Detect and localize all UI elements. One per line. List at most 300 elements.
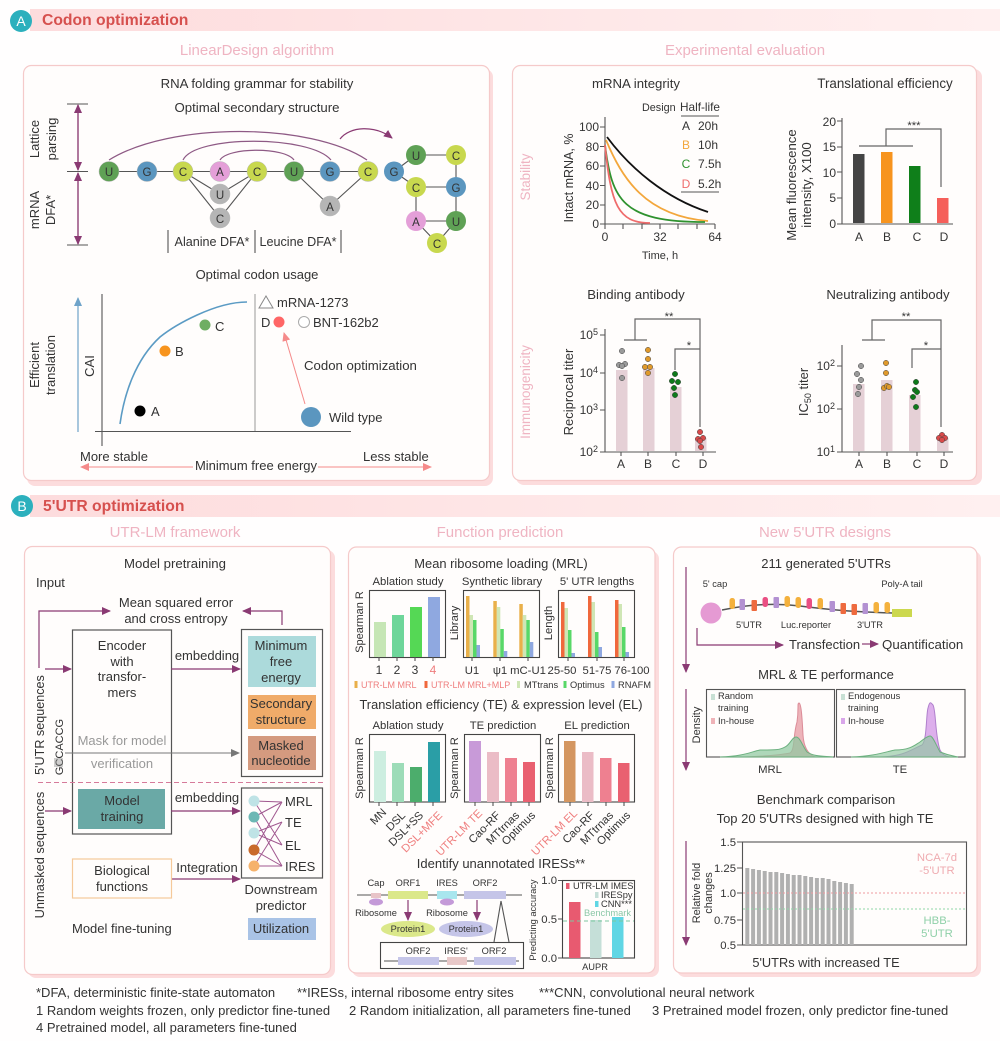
RNA hairpin structure: C: [412, 183, 420, 195]
arrows: data flow: Integration: [176, 860, 238, 875]
header: A Codon optimization: Codon optimization: [42, 12, 188, 29]
pretraining outputs box: Minimum: [255, 638, 307, 653]
footnotes: [36, 985, 948, 1035]
chart: TE prediction: MTtrnas: [484, 809, 522, 847]
RNA hairpin structure: [384, 145, 466, 253]
chart: Translational efficiency: 5: [829, 191, 836, 205]
RNA lattice nodes: C: [216, 214, 224, 226]
chart: MRL 5' UTR lengths: 25-50: [548, 665, 576, 677]
label: Efficient translation: translation: [43, 335, 58, 395]
arrows: data flow: embedding: [175, 648, 239, 663]
diagram: IRES translation: ORF2: [482, 946, 506, 956]
codon usage scatter: mRNA-1273: [277, 295, 349, 310]
chart: IRES predicting accuracy: CNN***: [601, 899, 632, 909]
diagram: IRES translation: Protein1: [391, 924, 425, 934]
chart: IRES predicting accuracy: Benchmark: [584, 908, 631, 918]
chart: EL prediction: EL prediction: [564, 720, 630, 732]
chart: EL prediction: Spearman R: [544, 737, 556, 799]
chart: IRES predicting accuracy: 0.5: [541, 914, 557, 926]
chart: Binding antibody: 3: [593, 402, 598, 412]
label: Efficient translation: [27, 335, 58, 395]
chart: TE prediction: Cao-RF: [467, 810, 503, 846]
footnotes: 2 Random initialization, all parameters fine-tuned: [349, 1003, 631, 1018]
chart: Binding antibody: C: [672, 457, 681, 471]
chart: Neutralizing antibody: D: [940, 457, 949, 471]
chart: TE prediction: Spearman R: [449, 737, 461, 799]
chart: TE ablation study: Spearman R: [354, 737, 366, 799]
sequence labels: [32, 675, 66, 918]
heading: New 5'UTR designs: New 5'UTR designs: [759, 524, 891, 541]
header: B 5'UTR optimization: B: [17, 498, 27, 514]
axis label: TE: TE: [893, 764, 908, 776]
text: Benchmark comparison: Benchmark comparison: [757, 792, 895, 807]
model training block: [78, 789, 165, 829]
text: Optimal secondary structure: Optimal secondary structure: [175, 100, 339, 115]
chart: Binding antibody: 5: [593, 327, 598, 337]
chart: fold changes: 1.0: [720, 888, 736, 900]
codon usage scatter: A: [151, 404, 160, 419]
chart: fold changes: [691, 837, 966, 952]
chart: Translational efficiency: intensity, X100: [799, 142, 814, 228]
label: Stability: Stability: [518, 153, 533, 200]
chart: fold changes: 0.75: [714, 915, 736, 927]
diagram: IRES translation: Ribosome: [426, 908, 468, 918]
chart: IRES predicting accuracy: Predicting accuracy: [528, 879, 538, 961]
chart: IRES predicting accuracy: 0.0: [541, 953, 557, 965]
legend: half-life: 7.5h: [698, 157, 721, 171]
label: Immunogenicity: Immunogenicity: [518, 345, 533, 439]
panel: LinearDesign algorithm: [24, 66, 493, 486]
chart: mRNA integrity: 80: [586, 140, 599, 154]
divider: pretraining and fine-tuning: [38, 782, 323, 784]
arrow: translation: [77, 298, 79, 432]
heading: Experimental evaluation: Experimental evaluation: [665, 42, 825, 59]
model training block: training: [101, 809, 143, 824]
diagram: mRNA construct: 5' cap: [703, 579, 727, 589]
chart: MRL synthetic library: Library: [449, 605, 461, 640]
chart: Binding antibody: B: [644, 457, 652, 471]
chart: mRNA integrity: 32: [653, 230, 667, 244]
chart: EL prediction: UTR-LM EL: [529, 808, 580, 858]
chart: MRL synthetic library: ψ1: [493, 665, 507, 677]
heading: 211 generated 5'UTRs: 211 generated 5'UTRs: [761, 556, 891, 571]
codon usage scatter: BNT-162b2: [313, 315, 379, 330]
chart: MRL 5' UTR lengths: [543, 576, 650, 677]
chart: EL prediction: Cao-RF: [561, 810, 597, 846]
RNA lattice nodes: A: [216, 167, 224, 179]
scale arrows: parsing and DFA: [67, 104, 88, 245]
chart: Translational efficiency: A: [855, 230, 863, 244]
diagram: mRNA construct: Luc.reporter: [781, 620, 831, 630]
label: mRNA DFA: [27, 191, 58, 229]
chart: MRL ablation study: 2: [394, 663, 401, 677]
diagram: IRES translation: Ribosome: [355, 908, 397, 918]
heading: LinearDesign algorithm: LinearDesign algorithm: [180, 42, 334, 59]
chart: mRNA integrity: 64: [708, 230, 722, 244]
chart: IRES predicting accuracy: [528, 875, 634, 972]
heading: Identify unannotated IRESs: Identify unannotated IRESs**: [417, 856, 585, 871]
chart: MRL ablation study: 3: [412, 663, 419, 677]
chart: Translational efficiency: 0: [829, 217, 836, 231]
text: Benchmark comparison: [717, 792, 934, 826]
chart: MRL ablation study: Ablation study: [373, 576, 444, 588]
diagram: IRES translation: IRES': [444, 946, 468, 956]
legend: half-life: 5.2h: [698, 177, 721, 191]
header: B 5'UTR optimization: 5'UTR optimization: [43, 498, 184, 515]
footnotes: **IRESs, internal ribosome entry sites: [297, 985, 514, 1000]
chart: TE ablation study: DSL+MFE: [400, 809, 445, 855]
chart: IRES predicting accuracy: 1.0: [541, 875, 557, 887]
chart: TE ablation study: [354, 720, 446, 855]
biological functions box: [72, 859, 172, 898]
RNA lattice nodes: C: [253, 167, 261, 179]
chart: Translational efficiency: B: [883, 230, 891, 244]
footnotes: *DFA, deterministic finite-state automaton: [36, 985, 275, 1000]
RNA lattice nodes: A: [326, 202, 334, 214]
pretraining outputs box: free: [270, 654, 292, 669]
RNA hairpin structure: C: [433, 239, 441, 251]
legend: MRL methods: [354, 680, 651, 690]
label: Efficient translation: Efficient: [27, 342, 42, 388]
legend: half-life: 10h: [698, 138, 718, 152]
header: B 5'UTR optimization: [11, 495, 1000, 517]
chart: mRNA integrity: [562, 76, 722, 262]
legend: half-life: Half-life: [680, 100, 720, 114]
heading: UTR-LM framework: UTR-LM framework: [110, 524, 241, 541]
labels: Alanine and Leucine DFA: Alanine DFA*: [175, 235, 250, 249]
chart: Neutralizing antibody: B: [883, 457, 891, 471]
chart: mRNA integrity: 20: [586, 198, 599, 212]
header: A Codon optimization: A: [16, 13, 26, 29]
text: Optimal codon usage: Optimal codon usage: [196, 267, 318, 282]
heading: Function prediction: Function prediction: [437, 524, 563, 541]
stability axis: [80, 449, 431, 473]
chart: fold changes: changes: [703, 872, 715, 914]
chart: EL prediction: Optimus: [595, 809, 633, 848]
chart: mRNA integrity: 60: [586, 159, 599, 173]
utilization block: Utilization: [253, 921, 309, 936]
codon usage scatter: [95, 294, 417, 446]
footnotes: 3 Pretrained model frozen, only predictor fine-tuned: [652, 1003, 948, 1018]
chart: TE prediction: Optimus: [500, 809, 538, 848]
chart: Neutralizing antibody: *: [924, 340, 929, 352]
codon usage scatter: B: [175, 344, 184, 359]
downstream predictor network: [242, 788, 322, 878]
text: loss function: Mean squared error: [119, 595, 234, 610]
chart: fold changes: 1.25: [714, 863, 736, 875]
chart: Translational efficiency: D: [940, 230, 949, 244]
chart: MRL density: Random: [718, 691, 753, 701]
pretraining outputs box: structure: [256, 712, 306, 727]
pretraining outputs box: Masked: [258, 738, 304, 753]
chart: IRES predicting accuracy: IRESpy: [601, 890, 633, 900]
chart: fold changes: -5'UTR: [919, 865, 955, 877]
chart: Binding antibody: 10: [580, 328, 593, 342]
chart: Neutralizing antibody: 10: [817, 359, 830, 373]
text: Model pretraining: Model pretraining: [124, 556, 226, 571]
chart: fold changes: 0.5: [720, 940, 736, 952]
downstream predictor network: IRES: [285, 859, 316, 874]
chart: Translational efficiency: 10: [823, 166, 836, 180]
workflow: Transfection to Quantification: Quantification: [882, 637, 963, 652]
text: Downstream predictor: [245, 882, 317, 913]
RNA lattice nodes: U: [105, 167, 113, 179]
chart: Neutralizing antibody: A: [855, 457, 863, 471]
RNA lattice nodes: C: [179, 167, 187, 179]
chart: MRL ablation study: 1: [376, 663, 383, 677]
text: RNA folding grammar: RNA folding grammar for stability: [161, 76, 354, 91]
chart: TE ablation study: DSL: [384, 810, 408, 834]
codon usage scatter: Wild type: [329, 410, 382, 425]
chart: Neutralizing antibody: [796, 287, 953, 471]
axis label: MRL: MRL: [758, 764, 782, 776]
diagram: mRNA construct: 3'UTR: [857, 620, 883, 630]
chart: Neutralizing antibody: 1: [830, 444, 835, 454]
chart: Neutralizing antibody: 50: [803, 393, 813, 403]
legend: half-life: B: [682, 138, 690, 152]
chart: MRL 5' UTR lengths: 5' UTR lengths: [560, 576, 635, 588]
legend: MRL methods: RNAFM: [618, 680, 651, 690]
footnotes: ***CNN, convolutional neural network: [539, 985, 755, 1000]
codon usage scatter: Codon optimization: [304, 358, 417, 373]
stability axis: Minimum free energy: [195, 458, 318, 473]
encoder box: [72, 630, 172, 834]
chart: TE density: In-house: [848, 716, 884, 726]
RNA hairpin structure: U: [412, 151, 420, 163]
legend: MRL methods: Optimus: [570, 680, 605, 690]
chart: fold changes: 5'UTR: [921, 928, 953, 940]
chart: Binding antibody: Reciprocal titer: [561, 348, 576, 435]
chart: MRL ablation study: 4: [430, 663, 437, 677]
workflow: Transfection to Quantification: [697, 628, 963, 652]
label: mRNA DFA: DFA*: [43, 195, 58, 225]
RNA lattice nodes: G: [143, 167, 152, 179]
chart: TE ablation study: Ablation study: [373, 720, 444, 732]
RNA hairpin structure: G: [390, 167, 399, 179]
sequence labels: GCCACCG: [54, 719, 66, 775]
sequence labels: Unmasked sequences: [32, 792, 47, 918]
chart: MRL synthetic library: [449, 576, 546, 677]
codon usage scatter: D: [261, 315, 270, 330]
diagram: IRES translation: ORF1: [396, 878, 420, 888]
chart: MRL 5' UTR lengths: 51-75: [583, 665, 611, 677]
label: mRNA DFA: mRNA: [27, 191, 42, 229]
chart: fold changes: NCA-7d: [917, 852, 957, 864]
chart: Translational efficiency: Mean fluorescence: [784, 129, 799, 241]
encoder box: Mask for model: [78, 733, 167, 748]
chart: MRL density: In-house: [718, 716, 754, 726]
diagram: IRES translation: ORF2: [406, 946, 430, 956]
chart: MRL density: training: [718, 703, 748, 713]
chart: MRL ablation study: Spearman R: [354, 591, 366, 653]
text: Downstream predictor: predictor: [256, 898, 307, 913]
downstream predictor network: MRL: [285, 794, 312, 809]
chart: mRNA integrity: Time, h: [642, 250, 678, 262]
chart: EL prediction: MTtrnas: [578, 809, 616, 847]
chart: mRNA integrity: Intact mRNA, %: [562, 134, 576, 222]
stability axis: Less stable: [363, 449, 429, 464]
chart: Binding antibody: 10: [580, 403, 593, 417]
legend: half-life: 20h: [698, 119, 718, 133]
chart: TE density: training: [848, 703, 878, 713]
chart: Neutralizing antibody: IC: [796, 403, 811, 416]
workflow arrows: [685, 567, 687, 945]
diagram: mRNA construct: 5'UTR: [736, 620, 762, 630]
utilization block: [248, 918, 316, 940]
biological functions box: Biological: [94, 863, 150, 878]
arrows: data flow: [39, 611, 282, 879]
text: loss function: [119, 595, 234, 626]
chart: mRNA integrity: 0: [602, 230, 609, 244]
legend: half-life: Design: [642, 102, 676, 114]
base pairing arcs: [109, 129, 392, 160]
downstream predictor network: EL: [285, 838, 301, 853]
chart: TE prediction: TE prediction: [470, 720, 536, 732]
RNA hairpin structure: C: [452, 151, 460, 163]
chart: MRL synthetic library: mC-U1: [510, 665, 546, 677]
text: Model fine-tuning: Model fine-tuning: [72, 921, 172, 936]
RNA hairpin structure: G: [452, 183, 461, 195]
diagram: IRES translation: Protein1: [449, 924, 483, 934]
footnotes: 1 Random weights frozen, only predictor fine-tuned: [36, 1003, 330, 1018]
footnotes: 4 Pretrained model, all parameters fine-tuned: [36, 1020, 297, 1035]
encoder box: transfor-: [98, 669, 146, 684]
chart: Binding antibody: 10: [580, 445, 593, 459]
label: Lattice parsing: Lattice: [27, 120, 42, 158]
chart: MRL synthetic library: Synthetic library: [462, 576, 543, 588]
chart: Binding antibody: 4: [593, 365, 598, 375]
legend: half-life: D: [682, 177, 691, 191]
chart: fold changes: HBB-: [924, 915, 951, 927]
RNA lattice nodes: U: [216, 190, 224, 202]
chart: Translational efficiency: [784, 76, 953, 244]
pretraining outputs box: energy: [261, 670, 301, 685]
RNA hairpin structure: U: [452, 217, 460, 229]
chart: MRL 5' UTR lengths: 76-100: [614, 665, 650, 677]
encoder box: mers: [108, 685, 137, 700]
chart: Binding antibody: 2: [593, 444, 598, 454]
chart: MRL density: [706, 690, 834, 757]
legend: half-life: A: [682, 119, 690, 133]
legend: MRL methods: MTtrans: [524, 680, 558, 690]
encoder box: with: [109, 654, 134, 669]
text: loss function: and cross entropy: [124, 611, 228, 626]
chart: MRL 5' UTR lengths: Length: [543, 606, 555, 640]
panel: Function prediction: [348, 547, 659, 977]
legend: half-life: C: [682, 157, 691, 171]
chart: Neutralizing antibody: 10: [817, 402, 830, 416]
chart: IRES predicting accuracy: UTR-LM IMES: [573, 881, 633, 891]
chart: mRNA integrity: 40: [586, 179, 599, 193]
chart: TE prediction: [434, 720, 540, 859]
stability axis: More stable: [80, 449, 148, 464]
chart: EL prediction: [529, 720, 634, 858]
heading: TE and EL: Translation efficiency (TE) & expression level (EL): [359, 697, 643, 712]
chart: mRNA integrity: mRNA integrity: [592, 76, 680, 91]
text: Downstream predictor: Downstream: [245, 882, 317, 897]
chart: MRL synthetic library: U1: [465, 665, 479, 677]
diagram: IRES translation: Cap: [367, 878, 385, 888]
chart: Translational efficiency: ***: [907, 120, 921, 132]
diagram: IRES translation: ORF2: [473, 878, 497, 888]
chart: TE ablation study: MN: [368, 807, 389, 828]
label: CAI: CAI: [82, 355, 97, 377]
chart: mRNA integrity: 0: [592, 217, 599, 231]
labels: Alanine and Leucine DFA: Leucine DFA*: [259, 235, 337, 249]
heading: MRL and TE performance: MRL & TE performance: [758, 667, 894, 682]
panel: New 5'UTR designs: [674, 547, 981, 977]
RNA lattice nodes: G: [326, 167, 335, 179]
chart: Translational efficiency: 20: [823, 115, 836, 129]
label: Lattice parsing: parsing: [44, 118, 59, 160]
downstream predictor network: TE: [285, 815, 302, 830]
header: A Codon optimization: [10, 9, 1000, 32]
pretraining outputs box: [242, 630, 322, 776]
arrows: data flow: embedding: [175, 790, 239, 805]
model training block: Model: [104, 793, 140, 808]
diagram: mRNA construct: Poly-A tail: [881, 579, 923, 589]
sequence labels: 5'UTR sequences: [33, 675, 47, 775]
labels: Alanine and Leucine DFA: [168, 230, 341, 253]
chart: Neutralizing antibody: 2: [830, 401, 835, 411]
chart: IRES predicting accuracy: AUPR: [582, 962, 608, 972]
pretraining outputs box: nucleotide: [251, 753, 311, 768]
text: Input: Input: [36, 575, 65, 590]
legend: half-life: [642, 100, 721, 192]
chart: Binding antibody: A: [617, 457, 625, 471]
chart: Neutralizing antibody: 10: [817, 445, 830, 459]
chart: mRNA integrity: 100: [579, 120, 599, 134]
diagram: mRNA construct: [700, 579, 923, 630]
chart: fold changes: Relative fold: [691, 863, 703, 923]
chart: Neutralizing antibody: C: [913, 457, 922, 471]
chart: Translational efficiency: C: [913, 230, 922, 244]
panel: Experimental evaluation: [512, 66, 982, 485]
heading: Mean ribosome loading: Mean ribosome loading (MRL): [414, 556, 588, 571]
encoder box: verification: [91, 756, 153, 771]
chart: TE prediction: UTR-LM TE: [434, 807, 485, 859]
chart: Neutralizing antibody: titer: [796, 367, 811, 393]
codon usage scatter: C: [215, 319, 224, 334]
workflow: Transfection to Quantification: Transfection: [789, 637, 860, 652]
chart: TE density: Endogenous: [848, 691, 901, 701]
chart: TE ablation study: DSL+SS: [387, 809, 426, 849]
RNA hairpin structure: A: [412, 217, 420, 229]
text: Benchmark comparison: Top 20 5'UTRs designed with high TE: [717, 811, 934, 826]
chart: MRL ablation study: [354, 576, 446, 677]
RNA lattice nodes: [99, 162, 378, 228]
chart: fold changes: 1.5: [720, 837, 736, 849]
chart: Neutralizing antibody: Neutralizing antibody: [826, 287, 950, 302]
diagram: IRES translation: [355, 878, 524, 968]
legend: MRL methods: UTR-LM MRL+MLP: [431, 680, 510, 690]
chart: Binding antibody: **: [665, 311, 674, 323]
biological functions box: functions: [96, 879, 149, 894]
label: Lattice parsing: [27, 118, 59, 160]
label: Density: Density: [691, 706, 703, 743]
chart: Binding antibody: 10: [580, 366, 593, 380]
RNA lattice nodes: C: [364, 167, 372, 179]
RNA lattice nodes: U: [290, 167, 298, 179]
text: 5'UTRs with increased TE: 5'UTRs with increased TE: [752, 955, 900, 970]
chart: TE density: [836, 690, 965, 757]
chart: Binding antibody: [561, 287, 716, 471]
chart: Neutralizing antibody: 2: [830, 358, 835, 368]
chart: Binding antibody: *: [687, 340, 692, 352]
chart: Translational efficiency: Translational efficiency: [817, 76, 953, 91]
chart: Translational efficiency: 15: [823, 140, 836, 154]
chart: Binding antibody: D: [699, 457, 708, 471]
